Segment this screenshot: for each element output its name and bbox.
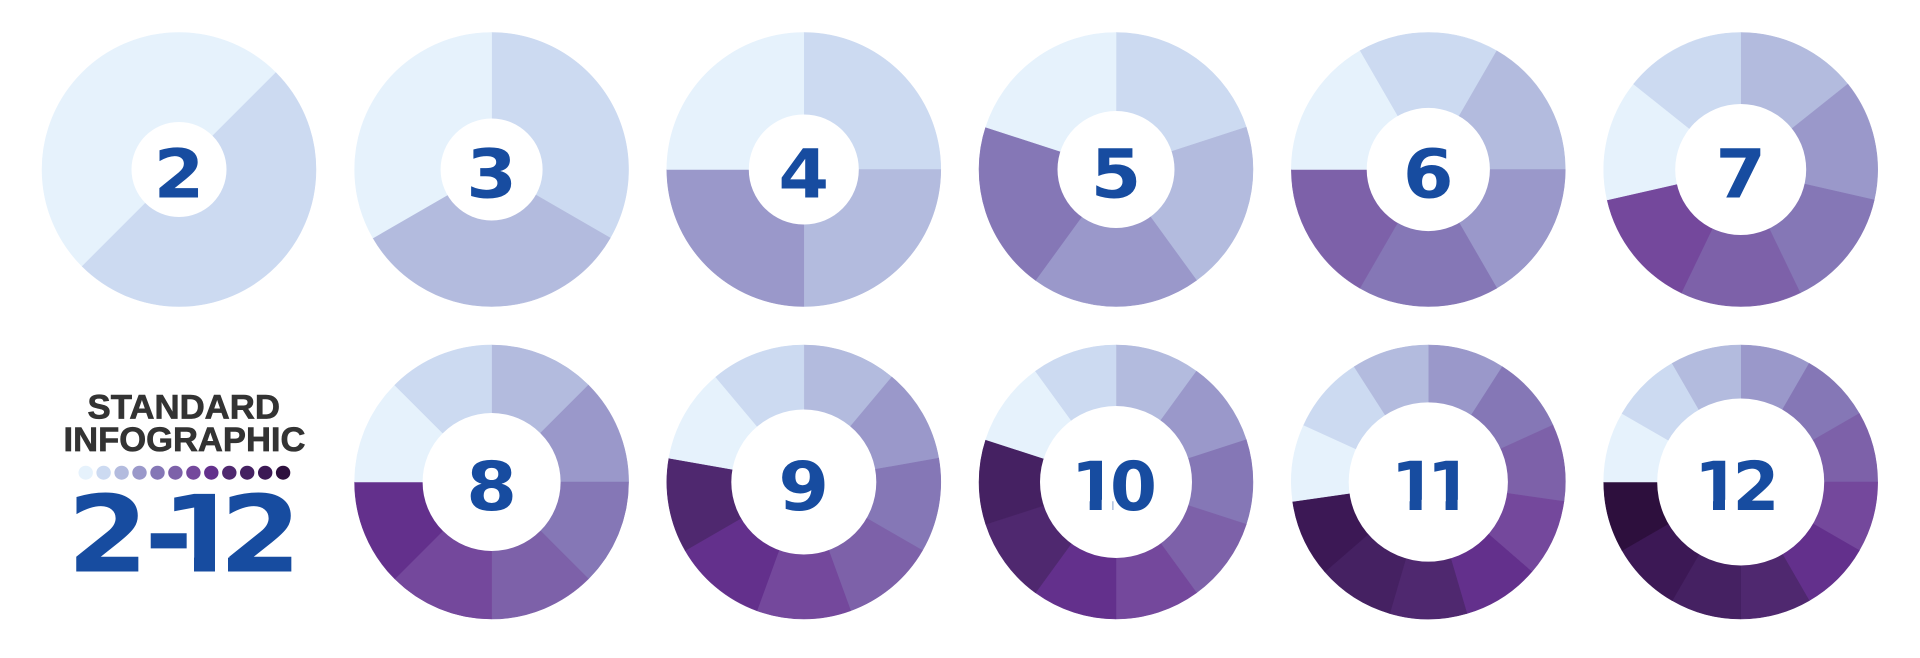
range label 2-12: 2-12 (67, 474, 302, 598)
wheel: 6 segments (1257, 0, 1600, 347)
center hole (1349, 402, 1508, 562)
wheel: 2 segments (0, 0, 373, 363)
segments of wheel 7 (1583, 0, 1915, 339)
segments of wheel 4 (667, 32, 941, 306)
segments of wheel 12 (1588, 329, 1894, 635)
number 11: 11 (1391, 447, 1474, 526)
wheel: 11 segments (1276, 327, 1584, 634)
number 6: 6 (1403, 134, 1454, 214)
center hole (441, 118, 543, 220)
center hole (1657, 398, 1824, 566)
number 5: 5 (1091, 134, 1141, 214)
wheel: 8 segments (326, 317, 657, 647)
number 12: 12 (1694, 447, 1779, 526)
center hole (1367, 108, 1490, 231)
title block (64, 388, 306, 598)
wheel: 9 segments (641, 320, 959, 641)
wheel: 12 segments (1588, 329, 1894, 635)
segments of wheel 6 (1257, 0, 1600, 347)
center hole (1040, 406, 1192, 558)
legend: colour dots (78, 466, 290, 480)
number 8: 8 (466, 447, 517, 526)
heading: standard: STANDARD (88, 388, 280, 426)
center hole (1058, 111, 1174, 228)
center hole (749, 114, 859, 224)
wheel: 5 segments (930, 3, 1287, 357)
number 10: 10 (1071, 447, 1157, 526)
heading: infographic: INFOGRAPHIC (64, 421, 306, 459)
wheel: 3 segments (304, 17, 629, 357)
segments of wheel 2 (0, 0, 373, 363)
segments of wheel 10 (961, 324, 1271, 640)
number 9: 9 (778, 447, 829, 526)
wheel: 7 segments (1583, 0, 1915, 339)
segments of wheel 8 (326, 317, 657, 647)
number 7: 7 (1715, 134, 1766, 214)
center hole (731, 410, 876, 554)
segments of wheel 5 (930, 3, 1287, 357)
number 4: 4 (778, 134, 829, 214)
center hole (132, 122, 226, 217)
center hole (1675, 104, 1806, 235)
segments of wheel 9 (641, 320, 959, 641)
number 2: 2 (154, 134, 204, 214)
wheel: 10 segments (961, 324, 1271, 640)
center hole (423, 413, 561, 551)
number 3: 3 (466, 134, 517, 214)
wheel: 4 segments (667, 32, 941, 306)
segments of wheel 11 (1276, 327, 1584, 634)
segments of wheel 3 (304, 17, 629, 357)
